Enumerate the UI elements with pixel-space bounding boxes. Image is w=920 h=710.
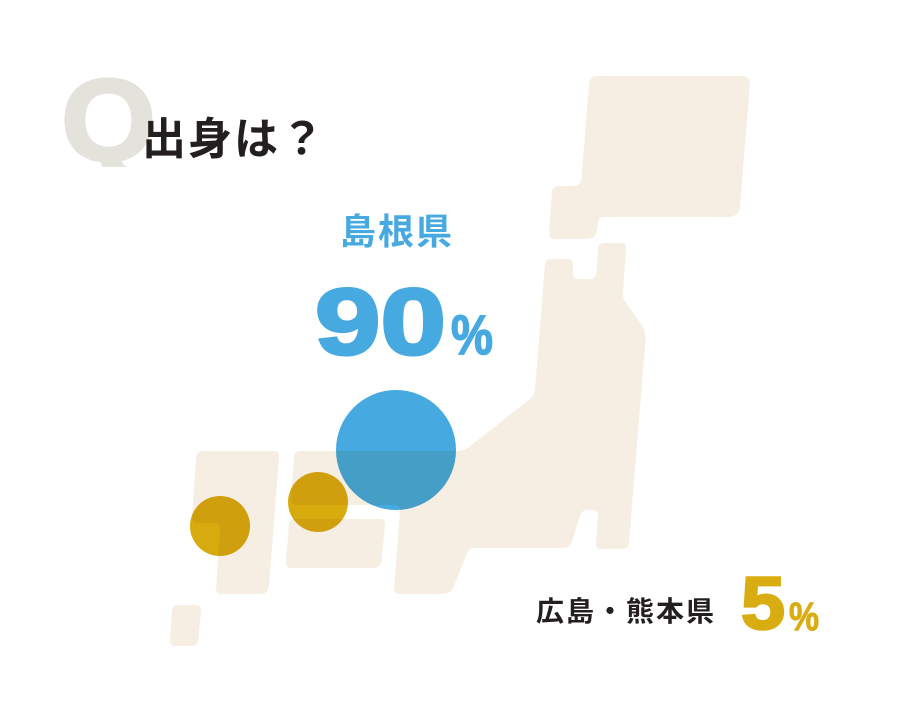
map: Hokkaido [549,76,750,239]
circle: Hiroshima 5% [288,472,348,532]
map of Japan [170,76,750,646]
title: 出身は？ [142,115,326,164]
number 5: 5 [741,562,785,645]
infographic canvas [64,76,819,646]
label: Hiroshima and Kumamoto: 広島・熊本県 [536,596,716,627]
map: Kyushu [192,451,279,594]
map: Okinawa [170,605,201,646]
number 90: 90 [315,269,446,374]
map: Shikoku [286,519,385,568]
value: 5% [741,562,819,645]
label: Shimane: 島根県 [340,211,454,252]
percent sign: % [789,595,819,639]
circle: Kumamoto 5% [190,496,250,556]
Q emblem: Q [61,55,156,185]
circle: Shimane 90% [336,390,456,510]
value: 90% [315,269,493,374]
percent sign: % [451,303,493,366]
map: Honshu [291,243,646,594]
